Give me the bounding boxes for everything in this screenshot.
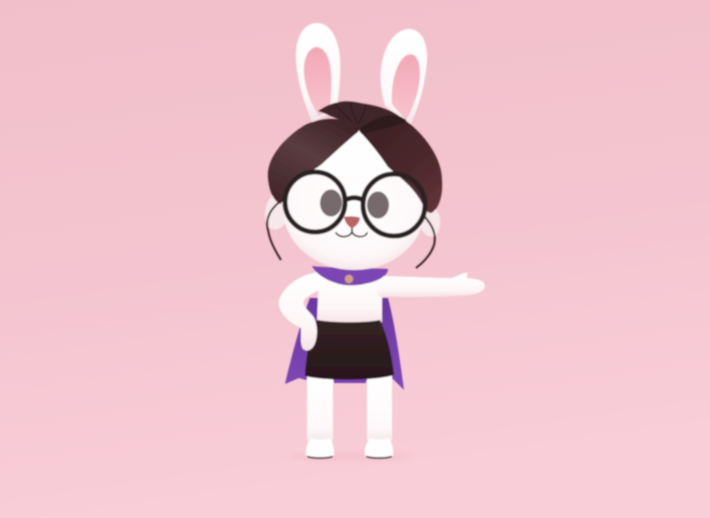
mouth bbox=[336, 228, 367, 237]
right side tuft bbox=[422, 210, 440, 236]
right leg bbox=[367, 375, 392, 446]
left leg bbox=[307, 375, 333, 446]
hair back right bbox=[358, 115, 442, 213]
left arm on hip bbox=[279, 272, 324, 351]
hair bun top bbox=[318, 101, 402, 128]
glasses bbox=[285, 172, 425, 236]
right wisp bbox=[416, 217, 435, 268]
cape bbox=[285, 298, 404, 390]
left wisp bbox=[267, 200, 282, 260]
left shoe bbox=[306, 438, 334, 458]
hair bbox=[267, 101, 442, 268]
right ear bbox=[381, 29, 427, 124]
brooch bbox=[345, 275, 353, 283]
hair left lock bbox=[268, 119, 360, 204]
ground shadow bbox=[288, 451, 412, 461]
right shoe bbox=[365, 438, 393, 458]
head bbox=[265, 122, 440, 270]
left side tuft bbox=[265, 196, 286, 229]
forehead point bbox=[310, 122, 400, 178]
character bbox=[265, 23, 485, 458]
hair strands bbox=[335, 102, 366, 124]
left ear bbox=[296, 23, 340, 122]
nose bbox=[344, 216, 360, 228]
collar bbox=[312, 266, 388, 285]
skirt bbox=[305, 320, 394, 380]
right arm pointing bbox=[376, 273, 485, 297]
face bbox=[283, 148, 425, 270]
eyes bbox=[320, 190, 389, 218]
torso bbox=[317, 270, 382, 324]
